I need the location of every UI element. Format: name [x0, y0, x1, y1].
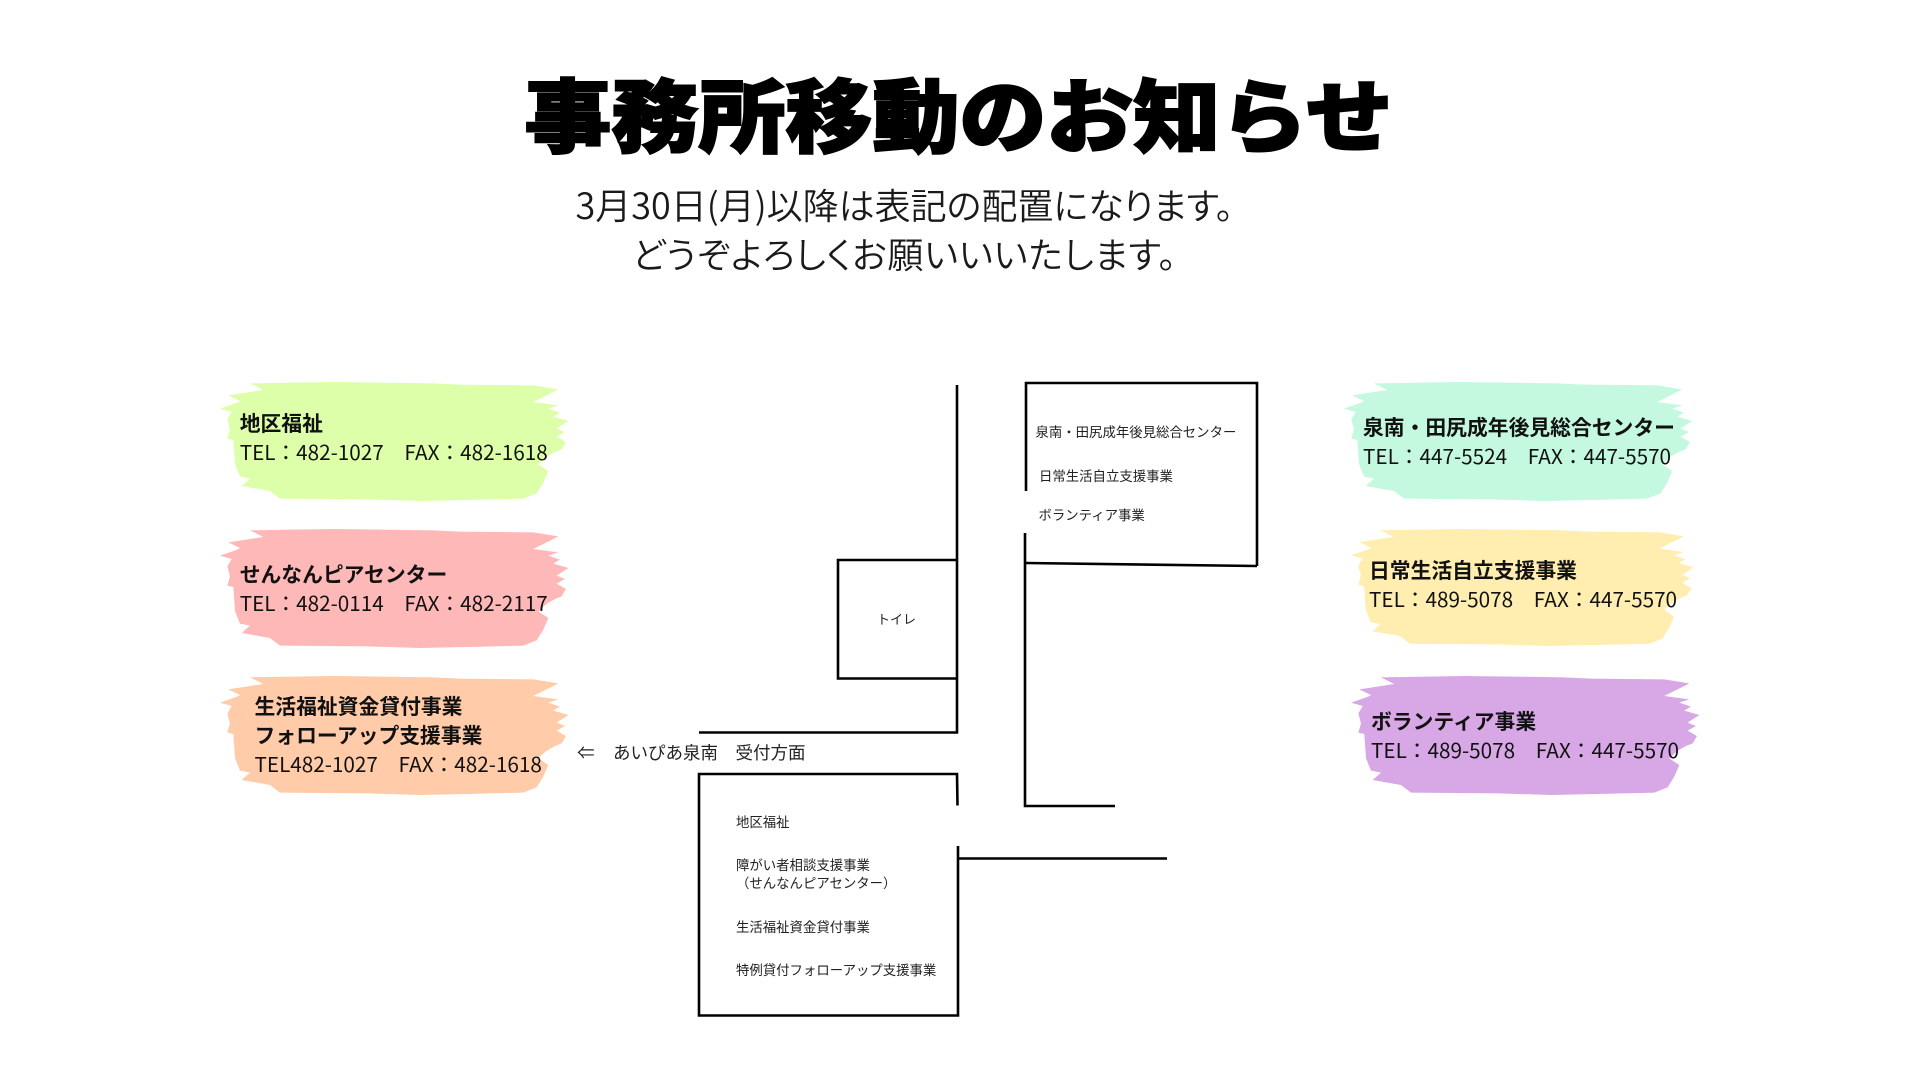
- label: せんなんピアセンター: （せんなんピアセンター）: [736, 872, 896, 892]
- panel heading: ボランティア事業: [1371, 705, 1536, 735]
- panel: せんなんピアセンター contact: [220, 529, 568, 648]
- label: 日常生活自立支援事業: 日常生活自立支援事業: [1039, 464, 1173, 484]
- phone and fax: TEL482-1027 FAX：482-1618: [254, 748, 542, 778]
- panel heading: 泉南・田尻成年後見総合センター: [1363, 411, 1675, 441]
- label: toilet: トイレ: [877, 608, 916, 628]
- room label: lower left room: [736, 811, 936, 979]
- subtitle text: [576, 178, 1233, 279]
- lower corridor wall: [958, 857, 1167, 860]
- panel: 日常生活自立支援事業 contact: [1351, 529, 1694, 646]
- subtitle text: どうぞよろしくお願いいいたします。: [632, 227, 1177, 279]
- panel heading line 2: フォローアップ支援事業: [254, 719, 482, 749]
- label: 泉南・田尻成年後見総合センター: 泉南・田尻成年後見総合センター: [1036, 420, 1236, 440]
- label: 特例貸付フォローアップ支援事業: 特例貸付フォローアップ支援事業: [736, 959, 936, 979]
- label: 生活福祉資金貸付事業: 生活福祉資金貸付事業: [736, 916, 870, 936]
- phone and fax: TEL：489-5078 FAX：447-5570: [1371, 734, 1679, 764]
- room label: upper right room: [1036, 420, 1236, 524]
- panel: ボランティア事業 contact: [1351, 676, 1699, 795]
- phone and fax: TEL：482-0114 FAX：482-2117: [240, 587, 548, 617]
- panel: 泉南・田尻成年後見総合センター contact: [1344, 382, 1692, 501]
- upper right room: [1026, 383, 1257, 566]
- toilet room: [838, 560, 957, 678]
- phone and fax: TEL：482-1027 FAX：482-1618: [240, 436, 548, 466]
- panel: 地区福祉 contact: [220, 382, 568, 501]
- panel: 生活福祉資金貸付事業 contact: [220, 676, 568, 795]
- direction label: arrow: ⇐: [577, 740, 594, 765]
- direction label: reception: あいぴあ泉南 受付方面: [613, 740, 806, 765]
- label: ボランティア事業: ボランティア事業: [1038, 504, 1145, 524]
- subtitle text: 3月30日(月)以降は表記の配置になります。: [576, 178, 1233, 230]
- panel heading: せんなんピアセンター: [240, 558, 447, 588]
- panel heading line 1: 生活福祉資金貸付事業: [254, 690, 462, 720]
- label: 障がい者相談支援事業: 障がい者相談支援事業: [736, 854, 870, 874]
- panel heading: 地区福祉: [240, 407, 323, 437]
- corridor wall: [699, 385, 957, 732]
- phone and fax: TEL：447-5524 FAX：447-5570: [1363, 440, 1671, 470]
- panel heading: 日常生活自立支援事業: [1369, 554, 1577, 584]
- right corridor wall: [1025, 533, 1115, 806]
- lower left room: [699, 774, 958, 1016]
- phone and fax: TEL：489-5078 FAX：447-5570: [1369, 583, 1677, 613]
- title: 事務所移動のお知らせ: [524, 54, 1393, 170]
- label: 地区福祉: 地区福祉: [736, 811, 790, 831]
